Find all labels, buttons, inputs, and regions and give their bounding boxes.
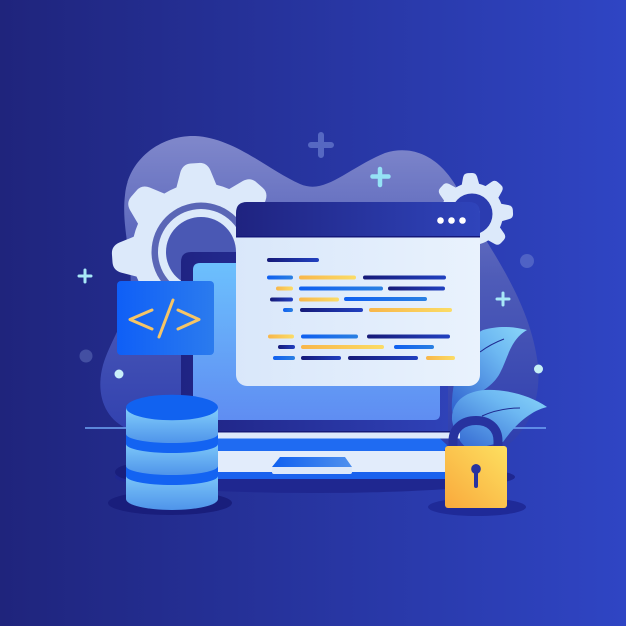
code lines	[267, 258, 455, 360]
background blob	[100, 136, 538, 450]
top cap	[126, 395, 218, 420]
laptop base	[200, 431, 460, 479]
bottom layer	[126, 470, 218, 510]
decorative plus signs and dots	[79, 135, 543, 378]
window dots	[437, 217, 466, 224]
small gear	[429, 171, 515, 252]
code tile	[117, 281, 214, 355]
window header	[236, 202, 480, 237]
tag symbols	[130, 300, 199, 337]
database shadow	[108, 491, 232, 515]
top layer	[126, 408, 218, 443]
laptop screen	[193, 263, 440, 420]
trackpad	[272, 457, 352, 467]
lock body	[445, 446, 507, 508]
laptop shadow	[115, 461, 515, 493]
padlock	[428, 420, 526, 516]
middle band	[126, 434, 218, 453]
leaves	[452, 327, 547, 450]
bottom band	[126, 466, 218, 485]
database	[108, 395, 232, 515]
large gear	[106, 158, 285, 337]
window body	[236, 203, 480, 386]
keyhole	[471, 464, 481, 488]
shackle	[453, 420, 498, 448]
ground lines	[85, 427, 546, 429]
laptop	[181, 252, 460, 479]
padlock shadow	[428, 498, 526, 516]
middle layer	[126, 440, 218, 475]
code window	[236, 202, 480, 386]
laptop lid	[181, 252, 448, 431]
